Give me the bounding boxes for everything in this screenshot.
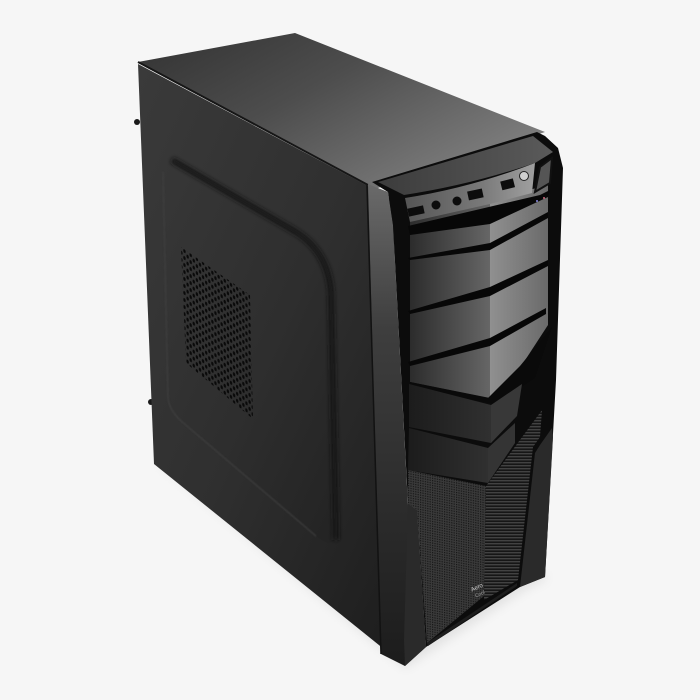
reset switch: [535, 158, 552, 192]
bay separators: [408, 190, 550, 366]
brand logo: Aero: [470, 583, 485, 594]
top panel: [138, 33, 545, 190]
top panel edge: [138, 62, 368, 185]
status lights: [536, 200, 538, 202]
front left strip: [368, 184, 426, 666]
right foot wing: [520, 428, 553, 587]
ventilation holes: [181, 247, 253, 419]
front black frame: [372, 132, 563, 647]
glossy drive bays: [408, 185, 552, 404]
lower left wing: [404, 503, 426, 666]
front mesh grille: [408, 410, 542, 643]
power button: [520, 172, 528, 180]
case feet: [134, 119, 154, 405]
USB and audio ports: [407, 178, 515, 217]
strip edge line: [367, 185, 381, 654]
brand logo: Cool: [474, 590, 486, 599]
floor shadow: [158, 440, 548, 668]
front I/O panel: [405, 158, 552, 222]
side panel: [138, 64, 405, 666]
brand logo: [470, 583, 488, 600]
matte drive bay covers: [408, 384, 522, 483]
embossed panel recess: [163, 160, 336, 543]
top front cap: [378, 136, 553, 195]
mesh base lip: [427, 583, 517, 646]
